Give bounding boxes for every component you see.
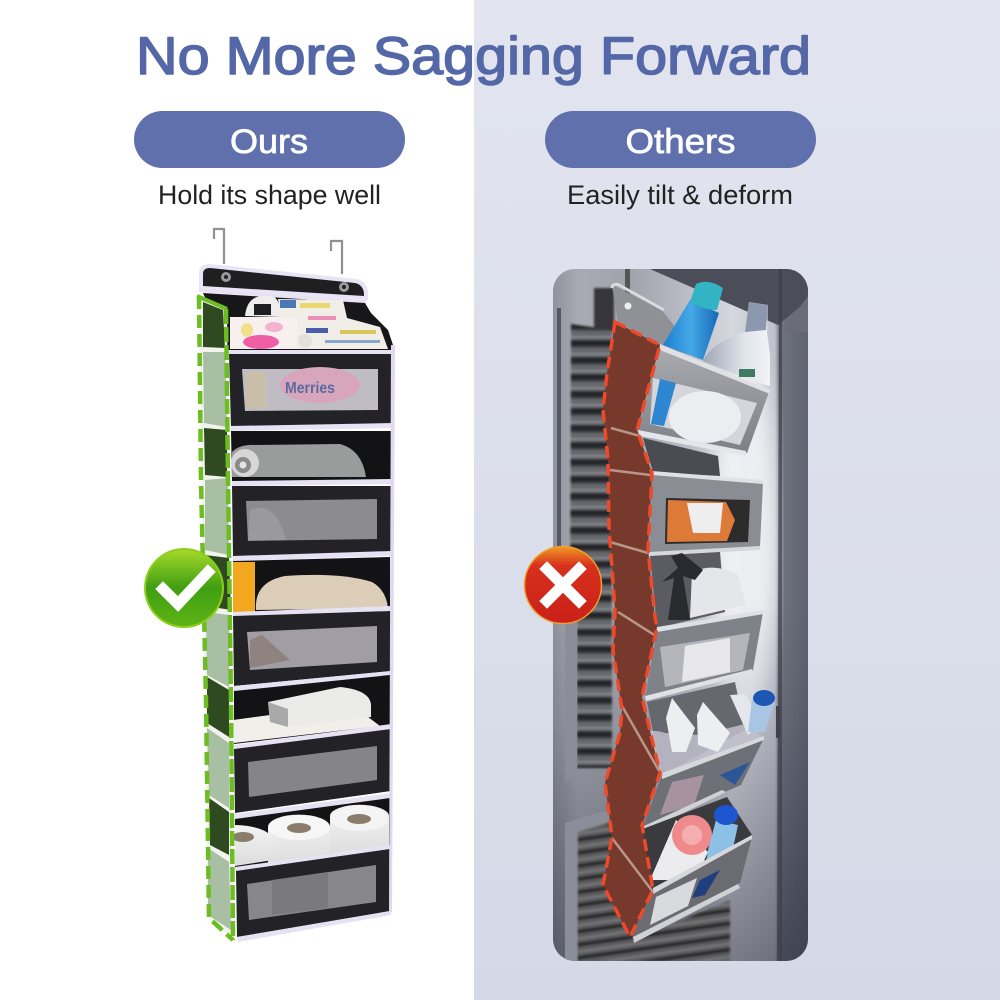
pill: ours: Ours	[230, 123, 308, 161]
side panel with green highlight	[197, 296, 233, 940]
white bottle with pink cap	[650, 815, 712, 880]
top shelf interior	[203, 293, 393, 350]
shelf 5 with toilet rolls	[232, 798, 391, 872]
door panel frames	[565, 620, 577, 783]
pocket 1	[638, 344, 770, 456]
shelf 4 with white towel	[233, 675, 391, 750]
door background	[553, 269, 808, 961]
pill: others: Others	[626, 123, 736, 161]
pill: ours	[134, 111, 405, 168]
shelf 4 back	[647, 682, 745, 775]
red highlighted side	[603, 322, 662, 937]
pocket 1: Merries	[285, 380, 335, 397]
right door seam	[777, 269, 782, 961]
pocket 5	[236, 849, 391, 942]
shelf 2 with grey towel	[231, 431, 392, 486]
shadow behind hanger	[594, 288, 614, 332]
title: No More Sagging Forward	[136, 27, 811, 86]
shelf 3 with spray and container	[650, 552, 746, 628]
caption: others: Easily tilt & deform	[567, 180, 793, 210]
lower louvers	[578, 822, 730, 961]
icon: red cross badge	[524, 546, 602, 624]
caption: ours: Hold its shape well	[158, 180, 381, 210]
pocket 3	[233, 611, 391, 691]
pocket 4	[643, 736, 764, 832]
icon: green check badge	[144, 548, 224, 628]
spray bottles	[650, 690, 775, 774]
pocket 4	[234, 729, 391, 819]
organizer top header	[199, 264, 368, 304]
pocket 2	[232, 486, 391, 561]
pill: others	[545, 111, 816, 168]
lower door tint	[553, 641, 808, 961]
pocket 5	[632, 835, 752, 943]
panel: right background	[474, 0, 1000, 1000]
product: our door organizer	[197, 229, 395, 942]
bottle: white detergent	[703, 302, 770, 386]
glow	[713, 350, 777, 730]
door trim	[557, 308, 561, 560]
shelf 3 with towel and bottle	[233, 557, 392, 616]
photo: competitor organizer on louvered door	[553, 269, 808, 961]
hanger panel with eyelet	[610, 282, 688, 354]
pocket 3	[645, 610, 764, 701]
upper louvers	[570, 324, 612, 768]
bottle: blue detergent	[663, 282, 723, 360]
shelf gap under pocket 1	[643, 438, 720, 476]
pocket 1	[228, 350, 394, 431]
blue cap bottle	[706, 805, 738, 863]
pocket 2	[649, 471, 763, 556]
ceiling shadow	[650, 269, 808, 325]
icon: door hooks	[214, 229, 342, 274]
right seam	[389, 345, 395, 912]
shelf 5 back	[640, 797, 752, 890]
diaper packs	[230, 296, 388, 349]
